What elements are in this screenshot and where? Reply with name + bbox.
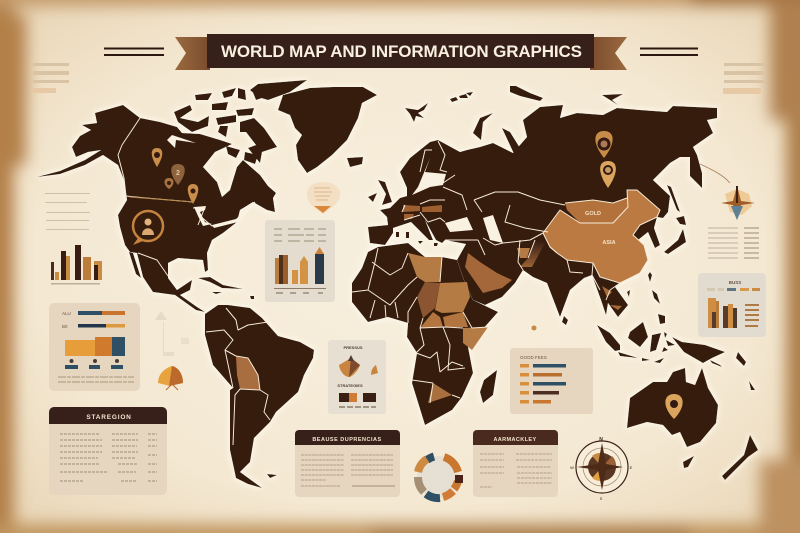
panel: pie infographic: STRATEGIES xyxy=(337,383,363,388)
panel heading: BEAUSE DUPRENCIAS xyxy=(312,437,382,443)
panel body xyxy=(301,455,393,486)
world map xyxy=(37,80,758,488)
China xyxy=(543,190,660,283)
compass rose xyxy=(570,437,633,501)
Caribbean and Falkland islands xyxy=(198,277,277,478)
table rows xyxy=(60,434,157,481)
decorative lines: top left xyxy=(32,48,164,93)
Kenya and Somalia xyxy=(463,327,488,350)
Madagascar xyxy=(480,370,497,403)
North and Central America xyxy=(37,105,276,312)
map badge: person pin USA xyxy=(133,211,163,245)
Bolivia xyxy=(236,356,260,390)
map pin: Canada 3 xyxy=(164,178,174,189)
panel: bar chart right: BUSS xyxy=(729,280,741,285)
Mediterranean islands xyxy=(396,232,438,246)
panel: Star region table xyxy=(49,407,167,495)
title text: WORLD MAP AND INFORMATION GRAPHICS xyxy=(221,42,582,61)
South America xyxy=(205,305,314,488)
Baja California xyxy=(129,252,141,278)
region labels: ASIA xyxy=(602,240,616,246)
region labels xyxy=(585,211,616,246)
donut chart xyxy=(417,456,459,498)
Central Europe regions xyxy=(403,205,442,219)
region labels: GOLD xyxy=(585,211,601,217)
map: highlighted regions xyxy=(118,118,660,445)
pie icon: small xyxy=(158,366,183,390)
Central Africa regions xyxy=(420,312,468,328)
Zambia xyxy=(428,383,452,403)
callout: small marker xyxy=(155,311,189,356)
title banner xyxy=(175,34,627,70)
Iceland xyxy=(347,157,363,167)
Japan and Sakhalin xyxy=(664,185,686,254)
Africa xyxy=(352,243,498,425)
Sudan xyxy=(435,282,470,313)
Eurasia xyxy=(368,105,717,317)
Arabia xyxy=(465,253,512,293)
map marker dot xyxy=(532,326,536,330)
decorative lines: top right xyxy=(640,48,764,94)
New Zealand xyxy=(722,435,758,480)
map pin: Canada 2 xyxy=(171,164,185,185)
Arctic Eurasian islands xyxy=(405,86,623,156)
Mongolia xyxy=(565,198,628,223)
panel: stacked bars xyxy=(49,303,140,391)
compass rose: W xyxy=(570,465,574,470)
map pin: Australia xyxy=(665,394,683,419)
map pin: Canada 4 xyxy=(188,184,198,204)
table heading: STAREGION xyxy=(86,414,132,421)
panel labels: ALU xyxy=(62,311,71,316)
New Guinea xyxy=(672,337,755,390)
panel body xyxy=(480,454,552,487)
map pin: Russia upper xyxy=(595,131,613,158)
Libya xyxy=(408,253,442,282)
Great Lakes xyxy=(194,202,256,228)
Indochina regions xyxy=(602,286,622,310)
legend lines: right xyxy=(708,228,759,258)
map pin: Canada 2: 2 xyxy=(176,170,180,177)
Sri Lanka and Philippines xyxy=(562,272,665,325)
country borders xyxy=(118,118,660,445)
Indonesia xyxy=(597,322,675,363)
map pin: Canada 1 xyxy=(152,148,162,167)
Pakistan region xyxy=(520,240,545,267)
panel: bar chart right xyxy=(698,273,766,337)
compass rose: E xyxy=(630,465,633,470)
panel: key text centre xyxy=(295,430,400,497)
panel: audience key xyxy=(473,430,558,497)
panel: horizontal bars xyxy=(510,348,593,414)
map pin: Russia lower xyxy=(600,161,616,188)
Arctic Canada islands xyxy=(174,80,307,164)
legend lines: left xyxy=(45,193,90,230)
inland seas xyxy=(167,135,503,243)
compass rose: N xyxy=(599,437,603,443)
compass rose: S xyxy=(600,496,603,501)
panel: bar chart centre xyxy=(265,220,335,302)
Chad xyxy=(417,282,440,318)
small compass star xyxy=(700,164,755,220)
panel: horizontal bars: GOOD FEES xyxy=(520,355,547,360)
bar chart: left xyxy=(51,245,102,284)
panel heading: AARMACKLEY xyxy=(493,437,537,443)
Greenland xyxy=(278,87,377,173)
map line: pin connector xyxy=(130,197,194,202)
Iran region xyxy=(517,248,530,258)
panel: pie infographic xyxy=(328,340,386,414)
Tasmania xyxy=(683,456,694,468)
panel: stacked bars: B/t xyxy=(62,324,68,329)
Britain and Ireland xyxy=(368,180,392,205)
Australia xyxy=(627,368,718,447)
panel: pie infographic: PRESSUS xyxy=(343,345,363,350)
callout: shield marker xyxy=(307,182,340,214)
